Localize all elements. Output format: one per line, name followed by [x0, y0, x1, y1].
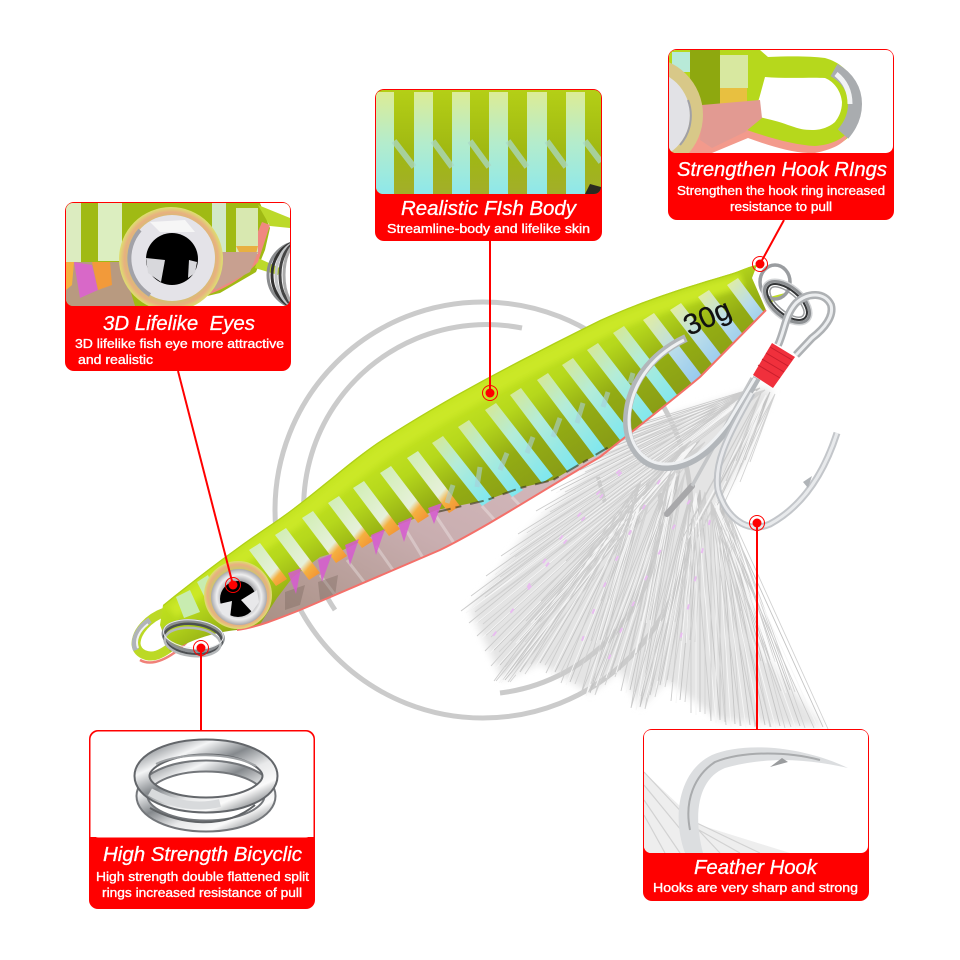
ring edge: [266, 242, 290, 306]
inset: hook close-up: [644, 730, 868, 853]
inset: hook eyelet close-up: [669, 50, 893, 153]
body stripes: [176, 278, 771, 618]
description line 2: resistance to pull: [730, 200, 832, 214]
callout line: split ring: [194, 640, 208, 730]
callout line: feather hook: [750, 516, 764, 729]
heading: Strengthen Hook RIngs: [677, 159, 887, 181]
sparkle flecks: [490, 450, 710, 680]
inset: scale stripes: [376, 90, 601, 194]
lure body: [135, 265, 785, 663]
description line 1: High strength double flattened split: [96, 870, 310, 884]
inset: eye close-up: [66, 203, 290, 306]
back hook shank: [667, 486, 692, 514]
split ring close-up: [142, 747, 270, 826]
heading: 3D Lifelike Eyes: [103, 313, 255, 335]
eye: [119, 207, 223, 311]
panel: 3D lifelike eyes: [65, 202, 291, 371]
panel: feather hook: [643, 729, 869, 901]
iridescent flecks: [288, 503, 442, 594]
weight label: 30g: [679, 293, 736, 342]
heading: Feather Hook: [694, 857, 818, 879]
description line 1: 3D lifelike fish eye more attractive: [75, 337, 284, 351]
description line 2: rings increased resistance of pull: [102, 886, 302, 900]
heading: High Strength Bicyclic: [103, 844, 302, 866]
callout line: fish body: [482, 241, 498, 400]
head eyelet: [135, 612, 188, 663]
feather skirt base tone: [470, 388, 823, 727]
panel: high strength bicyclic: [89, 730, 315, 909]
left hook: [627, 338, 757, 467]
tail ring: [760, 265, 790, 299]
red thread: [753, 343, 795, 388]
lure eye: [204, 561, 272, 629]
background rings logo: [275, 302, 691, 718]
callout line: hook rings: [752, 220, 784, 272]
description line 1: Strengthen the hook ring increased: [677, 184, 885, 198]
description: Streamline-body and lifelike skin: [387, 222, 590, 236]
callout line: eyes: [178, 371, 240, 592]
hook rigging at tail: [627, 265, 837, 527]
panel: strengthen hook rings: [668, 49, 894, 220]
heading: Realistic FIsh Body: [401, 198, 577, 220]
belly dark edge: [437, 445, 612, 512]
assist hook eye: [778, 295, 832, 355]
right hook: [717, 393, 837, 527]
tail tab: [766, 293, 785, 305]
silver belly band: [260, 448, 610, 624]
feather skirt: [461, 378, 828, 730]
split ring at head: [161, 617, 225, 659]
description line 2: and realistic: [78, 353, 153, 367]
panel: realistic fish body: [375, 89, 602, 241]
description: Hooks are very sharp and strong: [653, 881, 858, 895]
